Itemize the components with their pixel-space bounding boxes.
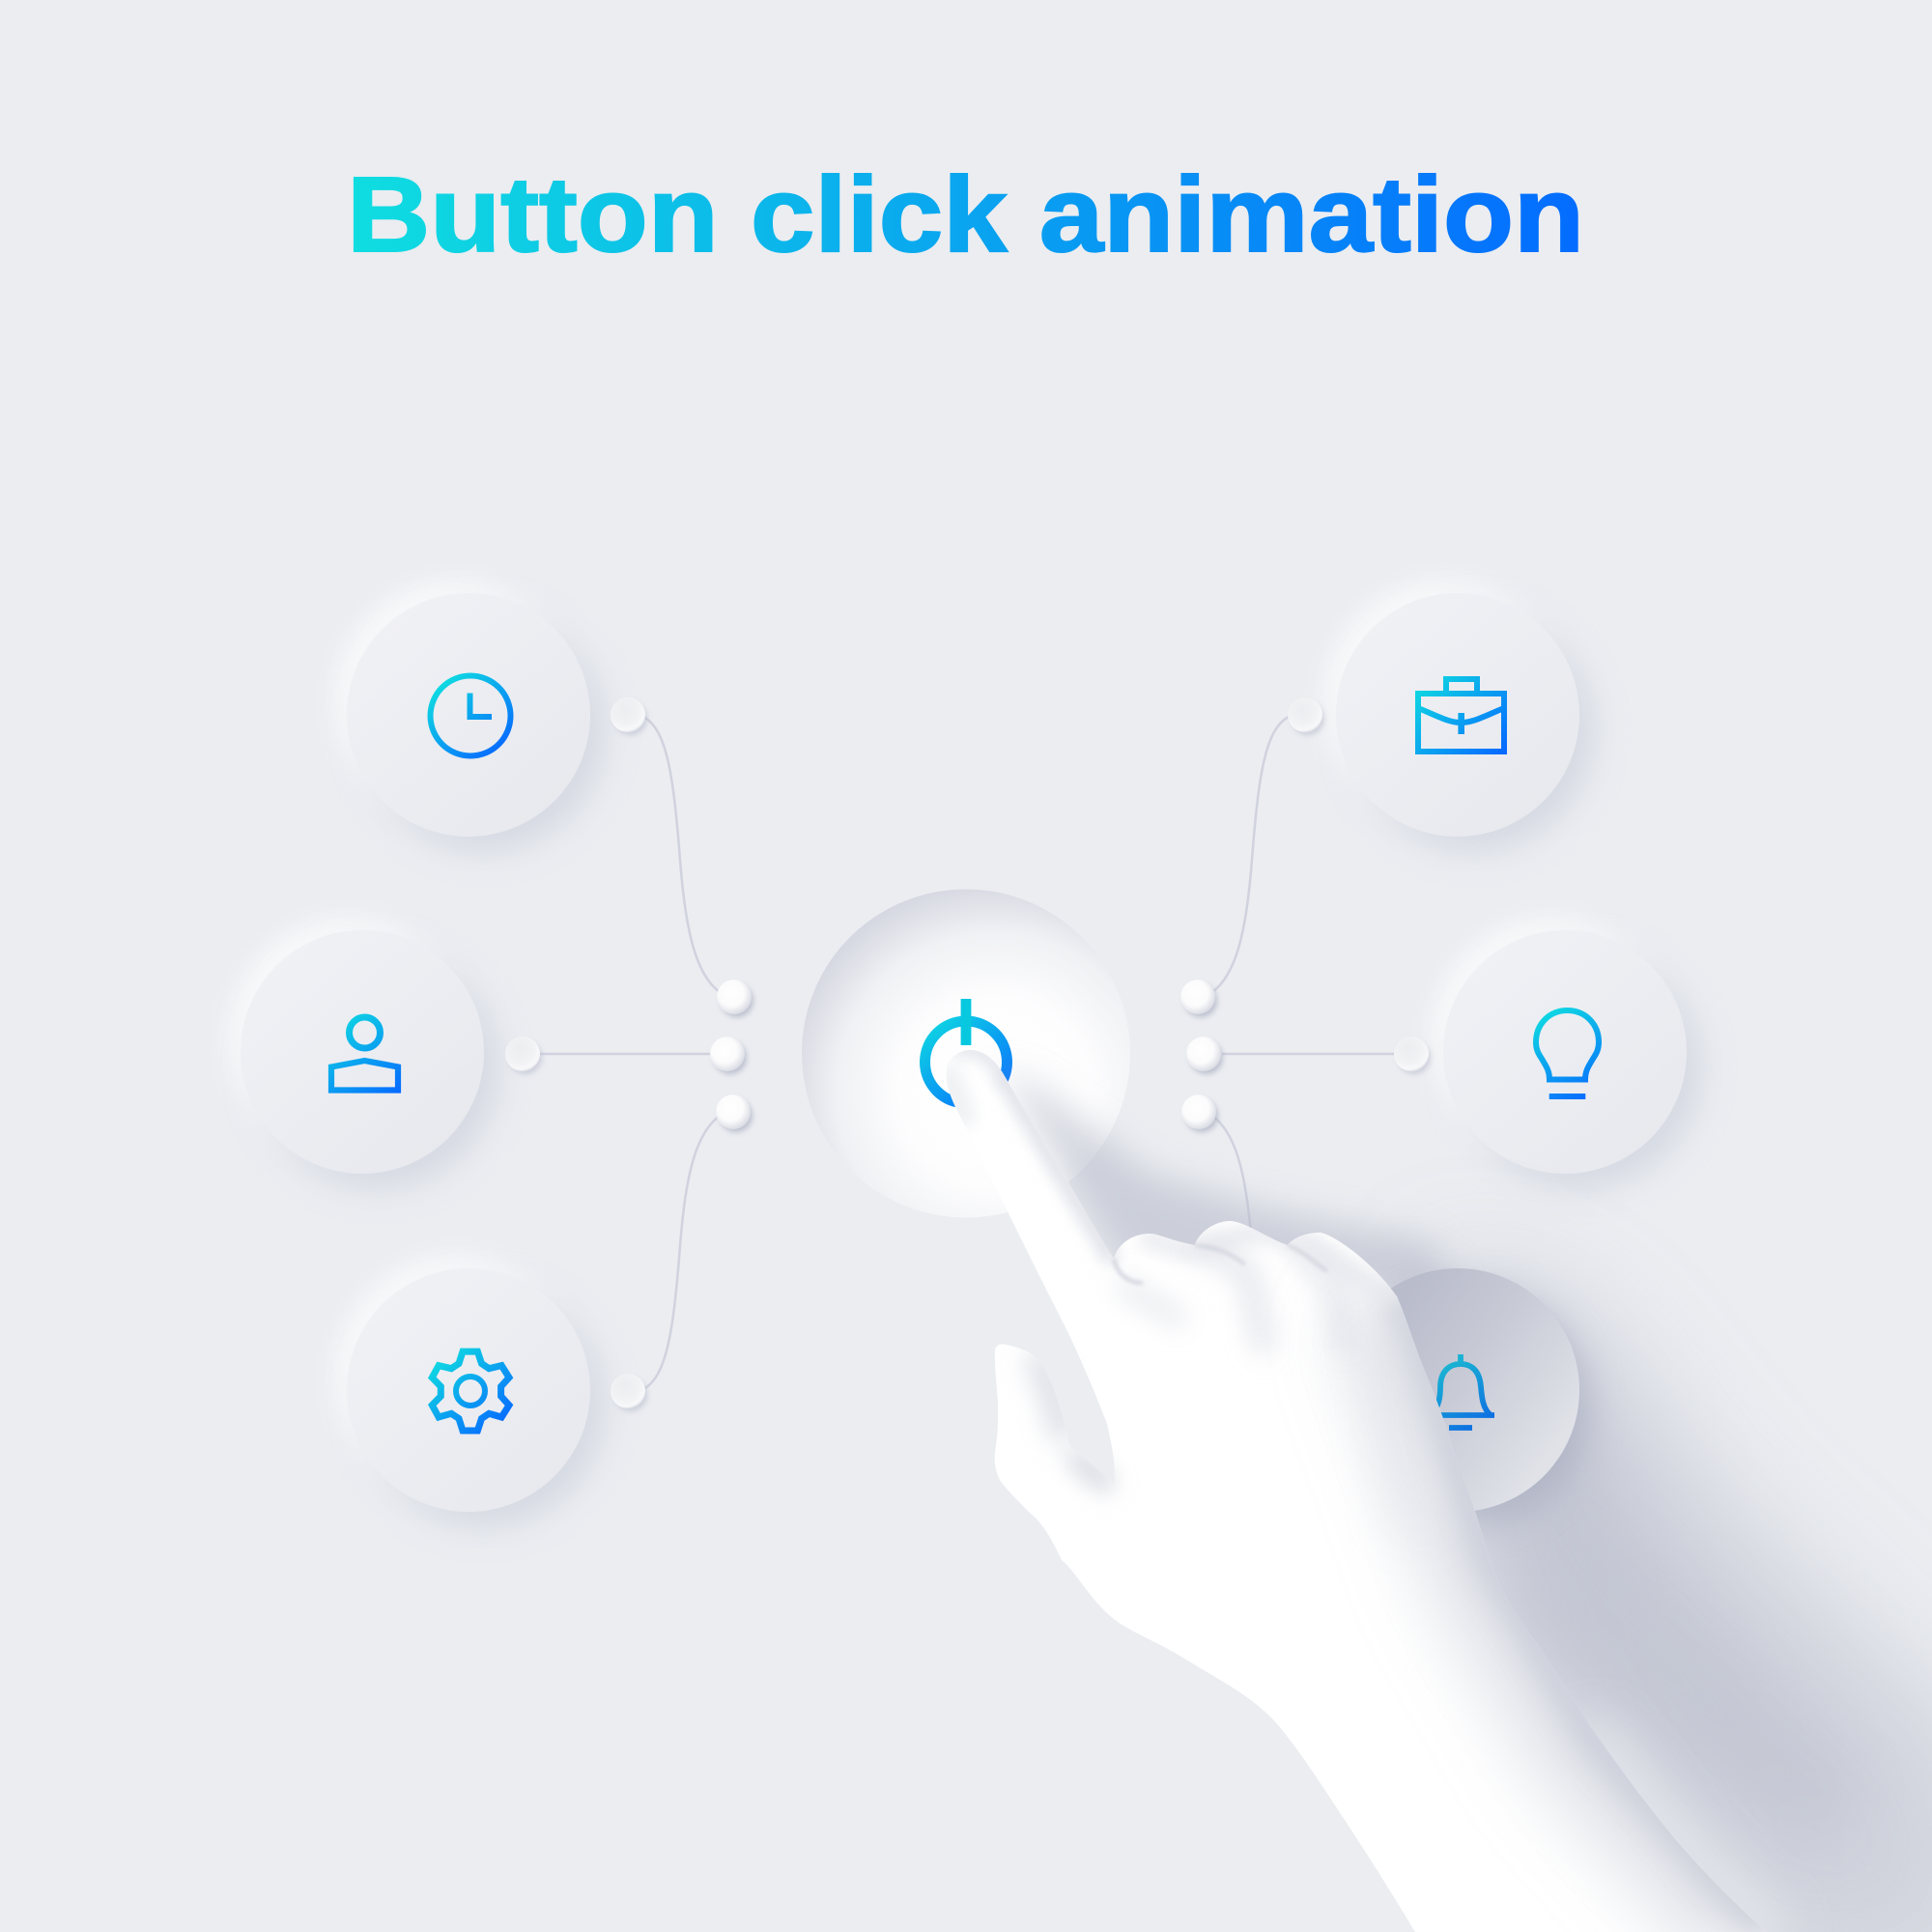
icon: briefcase [1418,679,1504,752]
icon: power [925,999,1007,1103]
icon: lightbulb [1536,1010,1599,1096]
icon: user [331,1017,398,1090]
icon: bell [1427,1354,1494,1428]
button: bell [1336,1268,1579,1512]
button: clock [335,582,604,850]
hand cast shadow [1000,1067,1932,1932]
main power button [802,889,1130,1217]
icon: gear [432,1351,509,1431]
icon: clock [431,676,510,755]
button: briefcase [1324,582,1593,850]
hand shading [947,1047,1768,1932]
button: user [229,919,497,1187]
title: Button click animation [347,156,1584,274]
connector nodes [505,697,1431,1411]
button: settings [335,1257,604,1525]
hand [947,1047,1768,1932]
connectors [540,717,1394,1389]
button: lightbulb [1432,919,1700,1187]
